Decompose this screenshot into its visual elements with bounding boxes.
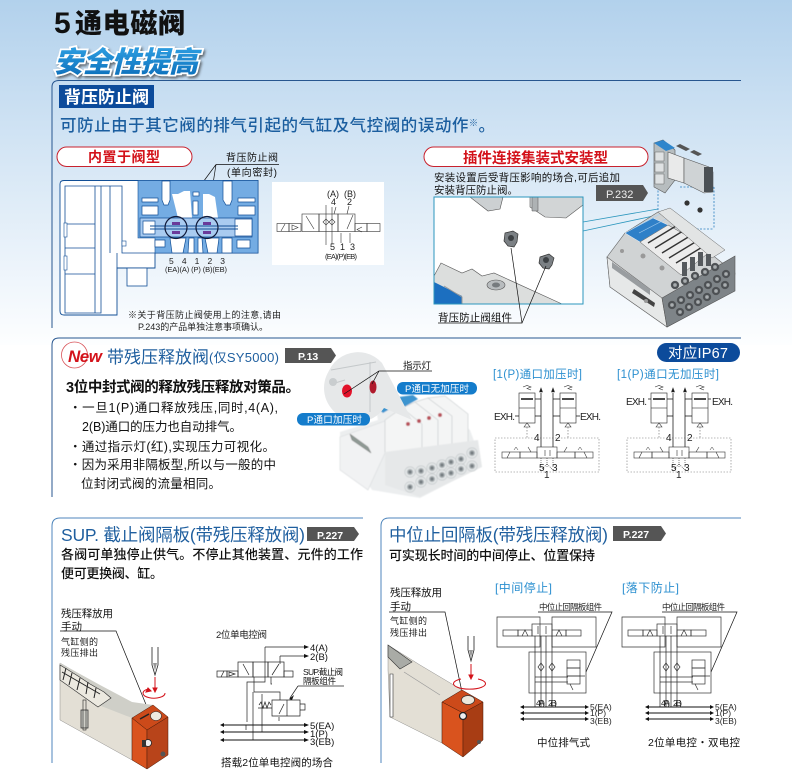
schematic: 2-position single solenoid: 隔板组件 (303, 676, 336, 686)
panel heading: SUP. 截止阀隔板(带残压释放阀) (61, 525, 305, 545)
callout: manual release (60, 607, 147, 707)
callout: indicator light (344, 360, 432, 394)
schematic: drop prevention: 2(B) (673, 698, 682, 708)
bullet list: ・因为采用非隔板型,所以与一般的中 (69, 457, 276, 472)
illustration: center check spacer (388, 636, 486, 757)
schematic: port 1(P) pressurised: EXH. (580, 412, 601, 423)
panel lead text: 3位中封式阀的释放残压释放对策品。 (66, 378, 300, 396)
pill: plug-in manifold mount type (424, 147, 648, 167)
schematic: port 1(P) not pressurised: 4 (666, 433, 672, 444)
port labels (165, 256, 228, 274)
schematic: drop prevention: 5(EA) (715, 702, 737, 712)
bullet list: 位封闭式阀的流量相同。 (81, 476, 221, 491)
callout: manual release (389, 586, 462, 692)
heading: safety improvement: 安全性提高 (54, 46, 202, 79)
bullet list: ・通过指示灯(红),实现压力可视化。 (69, 439, 275, 454)
panel heading (107, 348, 279, 367)
valve cross-section diagram (60, 180, 258, 315)
schematic: drop prevention (622, 580, 737, 726)
schematic: 2-position single solenoid: 1(P) (310, 729, 328, 740)
panel description: 便可更换阀、缸。 (61, 566, 163, 581)
callout: manual release: 手动 (390, 600, 411, 613)
schematic: mid stop: 1(P) (590, 708, 606, 718)
pill: built into valve type (57, 147, 192, 166)
icon: rotation arrow (143, 677, 165, 698)
callout: check valve assembly label (438, 248, 546, 324)
panel: residual pressure release valve (52, 338, 741, 498)
schematic: 2-position single solenoid: 4(A) (310, 643, 328, 654)
callout: manual release: 残压排出 (390, 627, 427, 638)
title: 5 (54, 7, 71, 40)
panel description: 可防止由于其它阀的排气引起的气缸及气控阀的误动作 (60, 117, 468, 135)
panel heading: 带残压释放阀 (107, 348, 209, 367)
schematic: 2-position single solenoid: 2(B) (310, 652, 328, 663)
callout: manual release: 气缸侧的 (390, 615, 427, 626)
illustration: stop valve spacer (60, 647, 168, 769)
schematic: 2-position single solenoid: 3(EB) (310, 737, 334, 748)
schematic: 2-position single solenoid: 2位单电控阀 (216, 629, 267, 641)
caption: single and double solenoid: 2位单电控・双电控 (648, 736, 740, 749)
schematic: port 1(P) pressurised: 5 (539, 463, 545, 474)
schematic: mid stop: 中位止回隔板组件 (539, 602, 602, 612)
footnote (128, 309, 281, 332)
panel description (61, 547, 363, 581)
blue valve body (138, 180, 258, 253)
page tag P.227 (307, 527, 359, 542)
schematic: port 1(P) not pressurised (617, 368, 733, 481)
page tag P.232 (596, 185, 648, 201)
schematic: mid stop: 4(A) (536, 698, 545, 708)
page tag P.13: P.13 (298, 351, 318, 363)
illustration: exploded manifold assembly (607, 140, 735, 327)
panel description: 可实现长时间的中间停止、位置保持 (389, 548, 595, 563)
manifold base (607, 212, 735, 327)
schematic: port 1(P) not pressurised: 3 (684, 463, 690, 474)
schematic: port 1(P) not pressurised: EXH. (626, 397, 647, 408)
schematic: port 1(P) pressurised: 3 (552, 463, 558, 474)
schematic: mid stop: 5(EA) (590, 702, 612, 712)
callout: indicator light: 指示灯 (403, 360, 431, 372)
icon: screwdriver (152, 647, 158, 675)
schematic: 2-position single solenoid: 5(EA) (310, 721, 334, 732)
footnote: P.243的产品单独注意事项确认。 (138, 321, 268, 332)
page tag P.227: P.227 (623, 529, 649, 541)
page tag P.232: P.232 (606, 189, 633, 201)
panel heading: 中位止回隔板(带残压释放阀) (389, 525, 608, 545)
badge: IP67: 对应IP67 (668, 344, 728, 362)
schematic: 2-position single solenoid: SUP.截止阀 (303, 667, 343, 677)
valve symbol diagram: 4 (331, 197, 336, 207)
callout: check valve label: 背压防止阀 (226, 151, 278, 164)
schematic: 2-position single solenoid (216, 629, 344, 748)
callout: manual release: 残压释放用 (61, 607, 113, 620)
illustration: valve manifold photo (297, 352, 482, 498)
badge: IP67 (657, 343, 740, 362)
page tag P.13 (285, 348, 336, 363)
schematic: mid stop: [中间停止] (495, 580, 552, 595)
zoom connector lines (583, 209, 658, 231)
page tag P.227: P.227 (317, 530, 343, 542)
schematic: mid stop: 3(EB) (590, 716, 612, 726)
panel: center check spacer (381, 518, 741, 763)
valve symbol diagram: (A) (B) (327, 189, 356, 199)
schematic: drop prevention: 1(P) (715, 708, 731, 718)
callout: check valve label: (单向密封) (227, 166, 277, 179)
callout: manual release: 气缸侧的 (61, 636, 98, 647)
valve symbol diagram: 5 1 3 (330, 242, 355, 252)
text: retrofit note (434, 171, 620, 196)
page background (0, 0, 792, 345)
schematic: port 1(P) not pressurised: 1 (676, 470, 682, 481)
valve symbol diagram: (EA)(P)(EB) (325, 252, 358, 261)
caption: center exhaust: 中位排气式 (537, 736, 590, 749)
bullet list: 2(B)通口的压力也自动排气。 (82, 419, 242, 434)
schematic: drop prevention: [落下防止] (622, 580, 679, 595)
schematic: drop prevention: 3(EB) (715, 716, 737, 726)
callout: check valve assembly label: 背压防止阀组件 (438, 311, 512, 324)
schematic: mid stop: 2(B) (548, 698, 557, 708)
port labels: (EA)(A) (P) (B)(EB) (165, 265, 228, 274)
panel description: 各阀可单独停止供气。不停止其他装置、元件的工作 (61, 547, 363, 562)
inset: detail view of check valve assembly (434, 197, 583, 304)
schematic: port 1(P) pressurised: 4 (534, 433, 540, 444)
panel description: 。 (478, 117, 495, 135)
schematic: port 1(P) pressurised: EXH. (494, 412, 515, 423)
magnified indicator circle (324, 352, 412, 422)
callout: P port not pressurised (397, 382, 477, 395)
schematic: port 1(P) not pressurised: 5 (671, 463, 677, 474)
valve symbol diagram (272, 182, 384, 265)
panel: SUP stop valve spacer (52, 518, 363, 769)
callout: P port pressurised: P通口加压时 (307, 414, 362, 426)
port labels: 5 4 1 2 3 (169, 256, 225, 266)
bullet list (69, 400, 278, 491)
schematic: port 1(P) pressurised (493, 368, 601, 481)
schematic: drop prevention: 4(A) (661, 698, 670, 708)
text: retrofit note: 安装设置后受背压影响的场合,可后追加 (434, 171, 620, 184)
schematic: port 1(P) not pressurised: EXH. (712, 397, 733, 408)
pill: plug-in manifold mount type: 插件连接集装式安装型 (463, 149, 608, 167)
page tag P.227 (613, 526, 666, 541)
title: 通电磁阀 (75, 9, 185, 39)
schematic: port 1(P) pressurised: 1 (544, 470, 550, 481)
schematic: port 1(P) not pressurised: 2 (687, 433, 693, 444)
exploded valve (654, 140, 713, 193)
callout: P port not pressurised: P通口无加压时 (405, 383, 469, 395)
text: retrofit note: 安装背压防止阀。 (434, 184, 518, 196)
badge: New: New (68, 347, 104, 366)
callout: manual release: 手动 (61, 620, 82, 633)
valve symbol diagram: 2 (347, 197, 352, 207)
pill: built into valve type: 内置于阀型 (88, 149, 160, 165)
callout: check valve label (178, 151, 279, 216)
tag: back pressure check valve: 背压防止阀 (64, 87, 149, 107)
icon: rotation arrow (454, 664, 486, 689)
schematic: port 1(P) pressurised: 2 (555, 433, 561, 444)
schematic: port 1(P) pressurised: [1(P)通口加压时] (493, 368, 582, 381)
callout: manual release: 残压排出 (61, 647, 98, 658)
schematic: drop prevention: 中位止回隔板组件 (662, 602, 725, 612)
bullet list: ・一旦1(P)通口释放残压,同时,4(A), (69, 400, 278, 415)
caption: 搭载2位单电控阀的场合 (221, 756, 334, 769)
callout: P port pressurised (297, 413, 370, 426)
badge: New (62, 342, 104, 368)
panel heading: (仅SY5000) (209, 350, 279, 365)
callout: manual release: 残压释放用 (390, 586, 442, 599)
schematic: mid stop (495, 580, 612, 726)
icon: screwdriver (468, 636, 474, 661)
schematic: port 1(P) not pressurised: [1(P)通口无加压时] (617, 368, 719, 381)
panel description: ※ (469, 118, 478, 128)
footnote: ※关于背压防止阀使用上的注意,请由 (128, 309, 281, 320)
panel: back pressure check valve (52, 80, 741, 332)
